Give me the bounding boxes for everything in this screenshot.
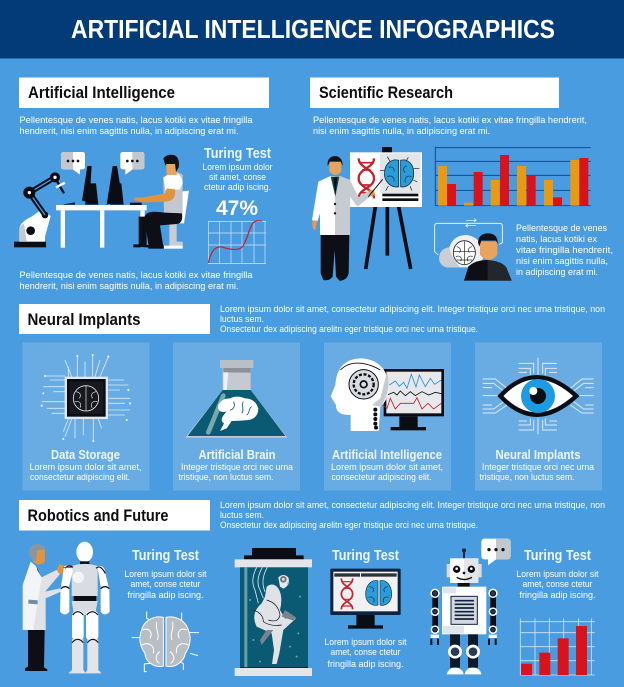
- text: neural implants: Neural Implants: [496, 447, 580, 462]
- panel: neural implants: [19, 304, 605, 490]
- card: artificial intelligence: [324, 342, 451, 490]
- heading: artificial intelligence: Artificial Intelligence: [28, 83, 175, 102]
- heading: robotics and future: [19, 500, 210, 530]
- text: artificial brain: tristique, non luctus sem.: [178, 472, 274, 483]
- text block: turing test 1: [124, 547, 207, 601]
- illustration: engineer and android: [23, 542, 110, 673]
- text: neural implants: tristique, non luctus sem.: [480, 472, 574, 483]
- icon: operator: [133, 155, 189, 249]
- title: ARTIFICIAL INTELLIGENCE INFOGRAPHICS: [71, 14, 555, 44]
- text block: robotics description: [220, 500, 605, 531]
- icon: monitors: [62, 166, 142, 205]
- icon: eye with circuits: [483, 358, 594, 434]
- icon: grey brain: [132, 612, 199, 672]
- text block: turing test 3: amet, conse ctetur: [522, 579, 592, 590]
- text block: researcher: in adipiscing erat mi.: [516, 267, 598, 278]
- text block: intro: Pellentesque de venes natis, lacus kotiki ex vitae fringilla: [20, 115, 253, 126]
- heading: scientific research: [310, 78, 559, 108]
- text block: researcher: natis, lacus kotiki ex: [516, 234, 597, 245]
- text block: turing test 2 copy: amet, conse ctetur: [330, 647, 400, 658]
- text: artificial brain: Integer tristique orci nec urna: [181, 462, 294, 473]
- text block: neural implants description: luctus sem.: [220, 314, 264, 325]
- icon: toy robot: [430, 539, 511, 674]
- text block: outro: Pellentesque de venes natis, lacus kotiki ex vitae fringilla: [20, 270, 253, 281]
- text block: robotics description: luctus sem.: [220, 510, 264, 521]
- text block: intro: Pellentesque de venes natis, lacus kotiki ex vitae fringilla hendrerit,: [313, 115, 587, 126]
- text block: neural implants description: Onsectetur dex adipiscing arelitn eger tristique orci nec urna tristique.: [220, 324, 478, 335]
- text block: turing test: Lorem ipsum dolor: [202, 162, 272, 173]
- text: artificial intelligence: Artificial Intelligence: [332, 447, 442, 462]
- icon: robot speech bubble: [481, 539, 511, 565]
- chart: red bar chart: [520, 618, 595, 675]
- text block: turing test 2 copy: [324, 637, 407, 670]
- text: artificial intelligence: Lorem ipsum dolor sit amet,: [331, 462, 443, 473]
- text block: intro: hendrerit, nisi enim sagittis nulla, in adipiscing erat mi.: [20, 126, 238, 137]
- icon: speech bubble right: [120, 152, 144, 175]
- header band: [0, 0, 624, 58]
- icon: monitor with dna and brain: [330, 569, 401, 629]
- panel: robotics and future: [19, 500, 605, 676]
- icon: desk: [56, 205, 147, 248]
- icon: android head and monitor: [331, 358, 444, 431]
- text block: robotics description: Onsectetur dex adipiscing arelitn eger tristique orci nec urna tristique.: [220, 520, 478, 531]
- icon: android in tank: [235, 548, 312, 676]
- illustration: scientist and easel: [312, 147, 422, 281]
- chart: turing line chart: [208, 221, 266, 264]
- text block: intro: nisi enim sagittis nulla, in adipiscing erat mi.: [313, 126, 490, 137]
- text block: turing test 3: fringilla adip iscing.: [520, 590, 596, 601]
- icon: engineer: [23, 544, 64, 671]
- text block: outro: hendrerit, nisi enim sagittis nulla, in adipiscing erat mi.: [20, 281, 238, 292]
- text block: researcher: nisi enim sagittis nulla,: [516, 256, 608, 267]
- text: data storage: Lorem ipsum dolor sit amet,: [30, 462, 142, 473]
- heading: robotics and future: Robotics and Future: [28, 506, 168, 525]
- text block: turing test: [202, 145, 272, 193]
- text block: turing test 1: Turing Test: [132, 547, 199, 564]
- heading: neural implants: [19, 304, 210, 334]
- icon: cloud brain and researcher: [435, 219, 512, 281]
- text: neural implants: [480, 447, 595, 483]
- text block: turing test 1: amet, conse ctetur: [130, 579, 200, 590]
- text block: turing test 1: fringilla adip iscing.: [128, 590, 204, 601]
- text block: turing test 3: Turing Test: [524, 547, 591, 564]
- text block: turing test: ctetur adip iscing.: [204, 182, 271, 193]
- icon: speech bubble left: [61, 152, 85, 175]
- text block: turing test: sit amet, conse: [209, 172, 266, 183]
- panel: scientific research: [310, 78, 613, 281]
- text: artificial brain: Artificial Brain: [198, 447, 276, 462]
- text block: turing test 2 copy: fringilla adip iscing.: [328, 659, 404, 670]
- text: data storage: consectetur adipiscing elit.: [30, 472, 130, 483]
- illustration: robot arm, monitors and operator: [14, 152, 189, 249]
- heading: scientific research: Scientific Research: [319, 83, 453, 102]
- text: artificial intelligence: [331, 447, 443, 483]
- text block: turing test: Turing Test: [204, 145, 271, 162]
- text: artificial brain: [178, 447, 294, 483]
- text block: robotics description: Lorem ipsum dolor sit amet, consectetur adipiscing elit. Integer tristique orci nec urna tristique, non: [220, 500, 605, 511]
- text block: intro: [20, 115, 253, 137]
- text block: researcher: vitae fringilla hendrerit,: [516, 245, 613, 256]
- text block: turing test 1: Lorem ipsum dolor sit: [124, 569, 207, 580]
- text block: turing test 2 copy: Lorem ipsum dolor sit: [324, 637, 407, 648]
- text: neural implants: Integer tristique orci nec urna: [482, 462, 595, 473]
- icon: scientist: [312, 156, 383, 281]
- icon: android: [60, 542, 110, 673]
- stat: 47%: 47%: [216, 197, 258, 220]
- card: neural implants: [475, 342, 602, 490]
- text block: turing test 3: [516, 547, 599, 601]
- icon: robot arm: [14, 172, 65, 247]
- text block: turing test 2: Turing Test: [332, 547, 399, 564]
- card: artificial brain: [173, 342, 300, 490]
- text: data storage: [30, 447, 142, 483]
- icon: easel: [350, 147, 422, 269]
- text block: intro: [313, 115, 587, 137]
- text block: neural implants description: [220, 304, 605, 335]
- heading: artificial intelligence: [19, 78, 269, 108]
- text: data storage: Data Storage: [51, 447, 120, 462]
- text block: researcher: [516, 223, 613, 278]
- text block: turing test 3: Lorem ipsum dolor sit: [516, 569, 599, 580]
- text block: outro: [20, 270, 253, 292]
- chart: bar chart: [435, 147, 591, 206]
- card: data storage: [22, 342, 150, 490]
- text block: researcher: Pellentesque de venes: [516, 223, 607, 234]
- icon: brain chip: [41, 354, 131, 442]
- heading: neural implants: Neural Implants: [28, 310, 140, 329]
- panel: artificial intelligence: [14, 78, 273, 292]
- text: artificial intelligence: consectetur adipiscing elit.: [332, 472, 432, 483]
- icon: brain flask: [185, 360, 287, 438]
- text block: neural implants description: Lorem ipsum dolor sit amet, consectetur adipiscing elit. Integer tristique orci nec urna tristique, non: [220, 304, 605, 315]
